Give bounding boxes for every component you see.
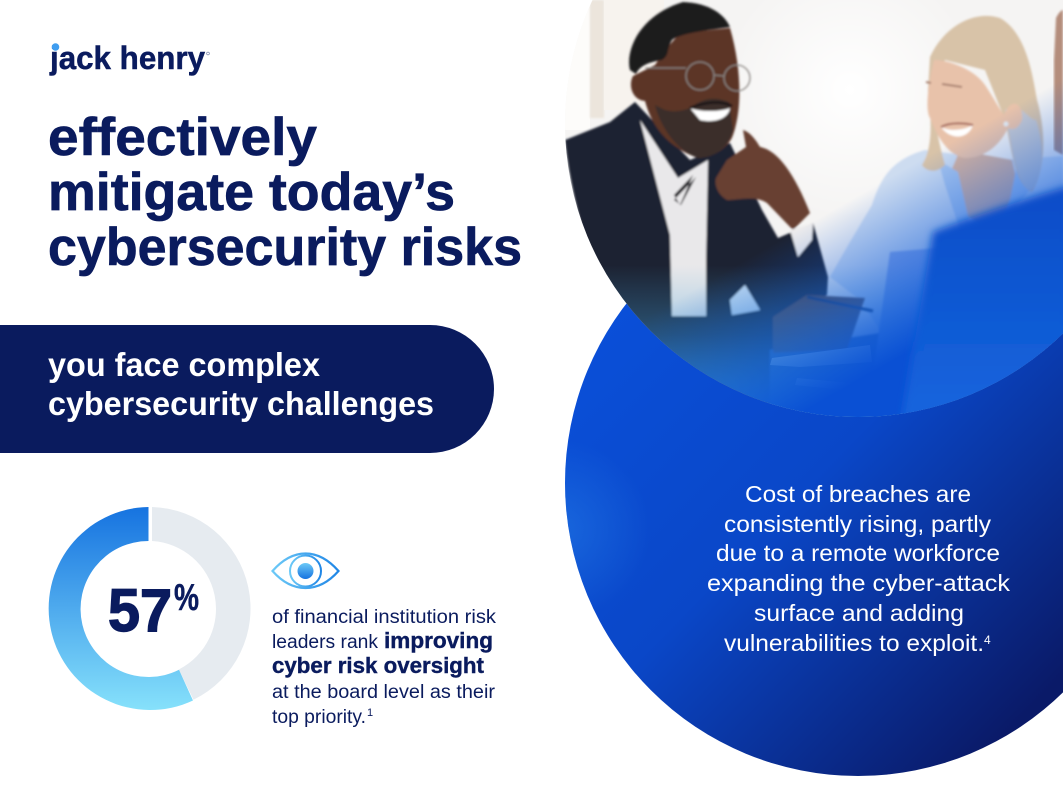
stat description: top priority.	[272, 707, 366, 728]
panel: large blue circle	[565, 190, 1063, 776]
blurred foreground person	[900, 186, 1063, 430]
banner: you face complex cybersecurity challenges	[0, 325, 494, 453]
title: effectively	[48, 108, 318, 167]
stat description: of financial institution risk	[272, 607, 497, 628]
stat description: leaders rank	[272, 632, 378, 653]
stat description: at the board level as their	[272, 682, 496, 703]
stat description: improving	[384, 628, 493, 653]
logo: jack henry: jack henry	[49, 40, 205, 76]
callout text: Cost of breaches are	[745, 481, 971, 507]
callout text: due to a remote workforce	[716, 540, 1000, 566]
man	[565, 2, 900, 425]
callout text: surface and adding	[754, 600, 964, 626]
laptop	[880, 248, 932, 332]
stat description: 1	[367, 707, 373, 719]
donut chart: 57%	[49, 507, 251, 710]
photo colour fades	[606, 274, 940, 417]
donut chart: 57%: 57	[108, 577, 172, 644]
banner: you face complex cybersecurity challenges: you face complex	[48, 346, 321, 383]
panel: photo of two colleagues smiling	[560, 0, 1063, 430]
title: cybersecurity risks	[48, 218, 522, 277]
icon: eye	[272, 554, 338, 588]
title	[48, 108, 522, 277]
callout text: 4	[984, 633, 991, 647]
callout text: expanding the cyber-attack	[707, 570, 1010, 596]
stat description: cyber risk oversight	[272, 653, 485, 678]
callout text: consistently rising, partly	[724, 511, 991, 537]
callout text	[707, 481, 1010, 656]
woman	[830, 16, 1063, 330]
person at right edge	[1054, 10, 1063, 155]
donut chart: 57%: %	[174, 577, 199, 618]
title: mitigate today’s	[48, 163, 455, 222]
stat description	[272, 607, 497, 728]
callout text: vulnerabilities to exploit.	[724, 630, 984, 656]
banner: you face complex cybersecurity challenges: cybersecurity challenges	[48, 385, 434, 422]
